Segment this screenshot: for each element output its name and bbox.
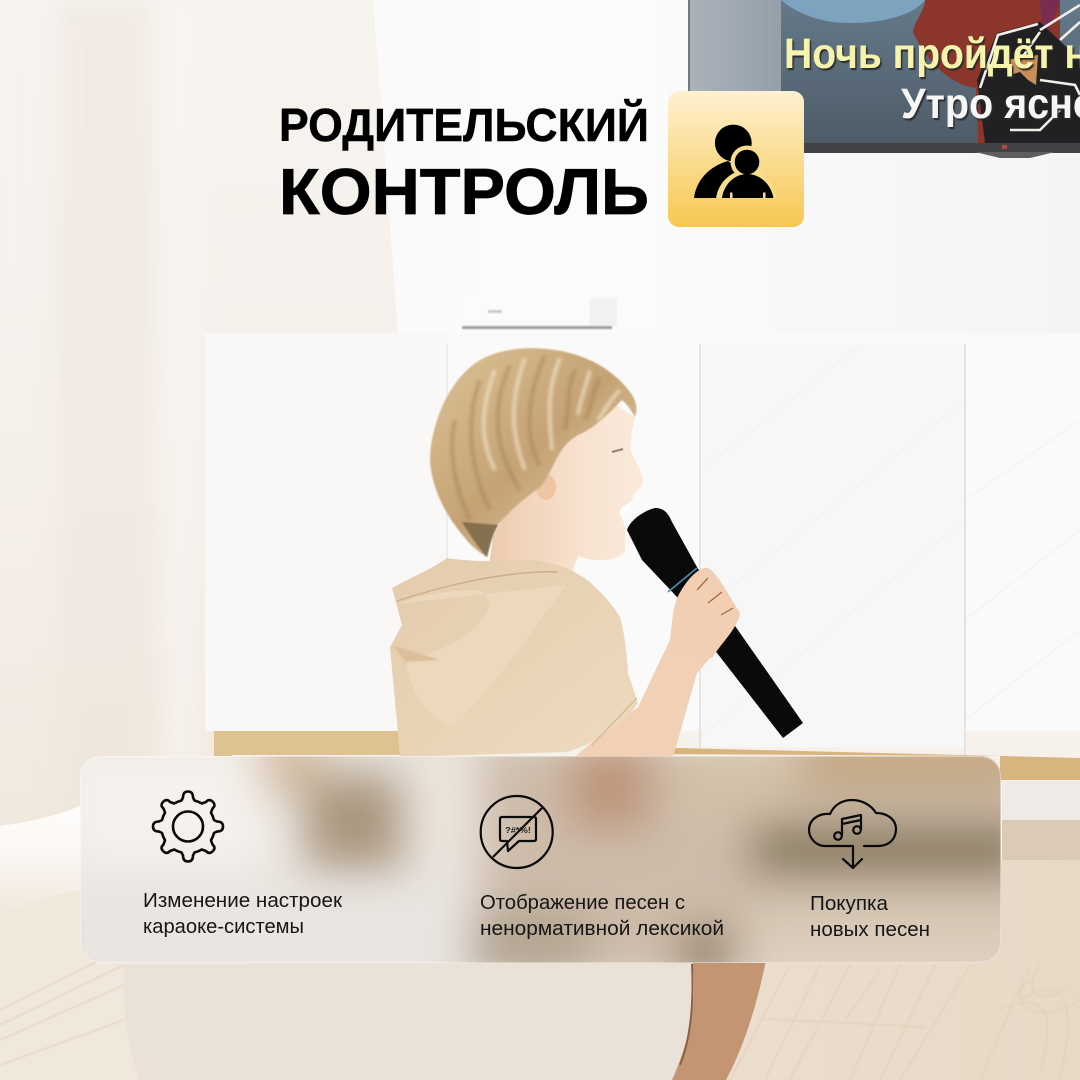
title: КОНТРОЛЬ xyxy=(279,155,649,228)
boy with microphone xyxy=(390,348,803,1080)
item: settings xyxy=(143,792,342,938)
wood floor xyxy=(0,780,1080,1080)
label: profanity: Отображение песен с xyxy=(480,892,685,914)
label: settings: караоке-системы xyxy=(143,916,304,938)
set-top box xyxy=(460,298,617,329)
leg xyxy=(672,960,766,1080)
item: purchase xyxy=(809,800,930,941)
hand xyxy=(670,568,740,658)
label: settings: Изменение настроек xyxy=(143,890,342,912)
microphone xyxy=(627,508,803,738)
label: purchase: Покупка xyxy=(810,893,889,915)
neck and face xyxy=(488,395,643,572)
label: purchase: новых песен xyxy=(810,919,930,941)
title xyxy=(279,99,649,228)
ottoman xyxy=(124,964,692,1080)
wood plinth xyxy=(214,731,405,756)
label: profanity: ненормативной лексикой xyxy=(480,918,724,940)
label: profanity xyxy=(480,892,724,940)
item: profanity xyxy=(480,796,724,940)
hair xyxy=(430,348,636,557)
title: РОДИТЕЛЬСКИЙ xyxy=(279,99,649,151)
icon: gear xyxy=(153,792,223,862)
icon: cloud with music note xyxy=(809,800,896,868)
hood fold xyxy=(397,585,566,725)
hoodie xyxy=(390,558,638,757)
arm xyxy=(575,640,712,757)
panel: blurred photo backdrop xyxy=(80,756,1001,963)
TV screen with karaoke lyrics xyxy=(688,0,1080,158)
white cabinets xyxy=(205,333,1080,781)
frosted glass panel xyxy=(80,756,1001,963)
label: settings xyxy=(143,890,342,938)
icon: prohibited speech bubble xyxy=(481,796,553,868)
icon: prohibited speech bubble: ?#*%! xyxy=(505,826,531,835)
hair strands xyxy=(452,355,600,520)
curtain xyxy=(0,0,398,830)
label: purchase xyxy=(810,893,930,941)
icon: parent and child badge xyxy=(668,91,804,227)
